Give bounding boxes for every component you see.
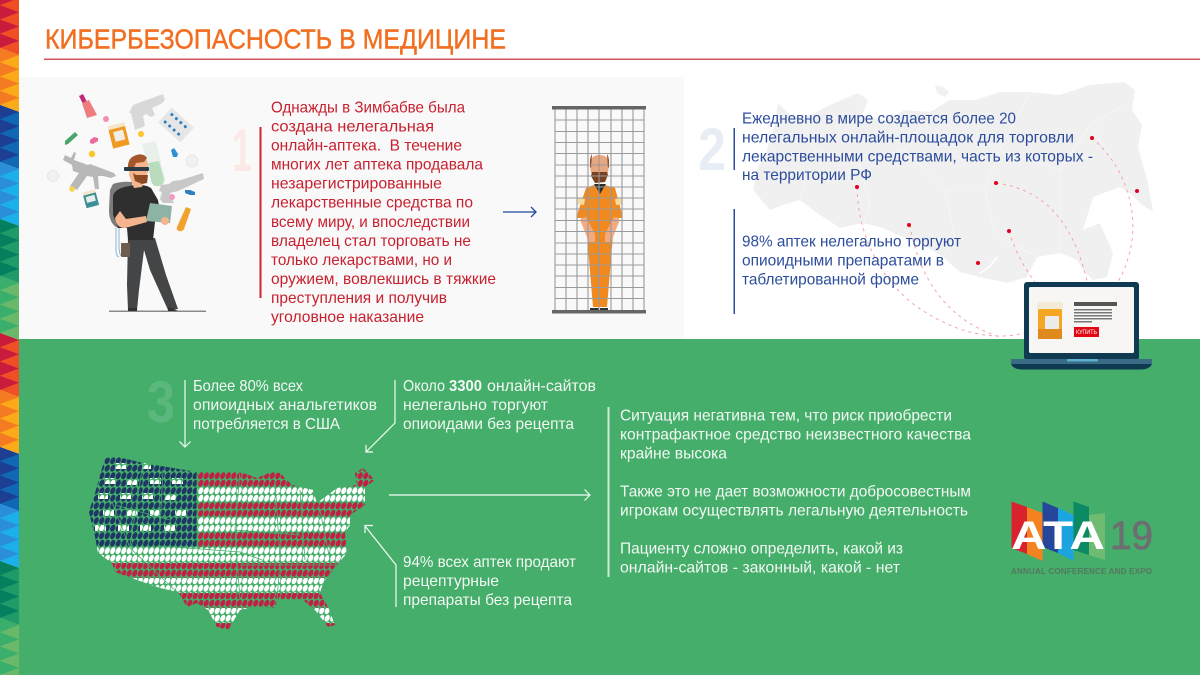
text block: story: преступления и получив [271, 290, 447, 307]
pill: pink [103, 116, 109, 122]
text block: pharmacies [403, 554, 577, 609]
text block: online pharmacies: лекарственными средствами, часть из которых - [742, 148, 1093, 166]
decorative side strip [0, 0, 19, 675]
text block: online pharmacies: на территории РФ [742, 167, 872, 184]
text block: US consumption: опиоидных анальгетиков [193, 397, 377, 414]
icon: large test tube [142, 141, 165, 186]
icon: orange bottle [108, 122, 130, 149]
arm [115, 211, 147, 228]
hair [128, 154, 147, 170]
text block: story: многих лет аптека продавала [271, 157, 483, 174]
text block: pharmacies: препараты без рецепта [403, 592, 572, 609]
title: КИБЕРБЕЗОПАСНОСТЬ В МЕДИЦИНЕ [45, 24, 506, 54]
panel: story background [19, 77, 684, 339]
capsule: blue [185, 190, 195, 195]
text block: opioid share: 98% аптек нелегально торгуют [742, 234, 962, 250]
text block: consequences: крайне высока [620, 446, 727, 463]
title underline [44, 58, 1200, 60]
pill bottle [1037, 302, 1063, 339]
text block: story: только лекарствами, но и [271, 252, 452, 269]
top rail [552, 106, 646, 110]
number 3: 3 [147, 370, 175, 435]
text block: US consumption [193, 378, 377, 433]
capsule: blue [171, 148, 178, 157]
pill: yellow [69, 186, 75, 192]
text block: websites: Около [403, 378, 445, 395]
icon: tube liquid [148, 161, 164, 186]
text block: pharmacies: 94% всех аптек продают [403, 554, 577, 571]
panel: Russia map [753, 82, 1153, 283]
divider: opioid share [734, 209, 735, 314]
text block: US consumption: потребляется в США [193, 416, 340, 433]
text block: online pharmacies: нелегальных онлайн-площадок для торговли [742, 130, 1074, 146]
map: USA flag made of pills [89, 457, 374, 630]
icon: small test tube [65, 132, 78, 145]
divider: online pharmacies [734, 128, 735, 170]
text block: story: лекарственные средства по [271, 195, 473, 212]
text block: consequences: Пациенту сложно определить, какой из [620, 540, 903, 557]
icon: revolver [159, 173, 204, 203]
text block: story: владелец стал торговать не [271, 233, 471, 250]
text block: consequences: Ситуация негативна тем, что риск приобрести [620, 408, 952, 425]
legs [127, 238, 178, 310]
text block: pharmacies: рецептурные [403, 573, 499, 590]
head [129, 156, 148, 188]
icon: hacker figure [109, 154, 206, 312]
wires [116, 228, 123, 257]
tablet [146, 203, 172, 223]
arrow: map to consequences [389, 490, 590, 500]
number 1: 1 [232, 117, 252, 184]
dashed routes and map markers [855, 136, 1139, 337]
text block: story: Однажды в Зимбабве была [271, 100, 465, 116]
text block: websites: нелегально торгуют [403, 397, 549, 414]
state borders [112, 463, 345, 600]
ground shadow [109, 310, 206, 312]
pill: white [48, 170, 58, 182]
logo: ATA 19: 19 [1110, 514, 1153, 558]
icon cluster: drugs and weapons [48, 94, 204, 231]
text block: websites: опиоидами без рецепта [403, 416, 574, 433]
arrow: to map from websites [366, 380, 395, 452]
buy button [1074, 327, 1099, 337]
eye mask [124, 167, 149, 171]
text block: story [271, 100, 496, 326]
bottom rail [552, 310, 646, 314]
prisoner [577, 154, 623, 310]
product description [1074, 302, 1117, 322]
pill: white [186, 155, 198, 167]
text block: story: уголовное наказание [271, 309, 424, 326]
icon: orange test tube [177, 207, 191, 231]
bars [555, 109, 644, 311]
logo: ATA 19: ANNUAL CONFERENCE AND EXPO [1011, 567, 1152, 576]
arrow: to map from US consumption [180, 380, 190, 447]
icon: blister pack [158, 108, 194, 142]
number 2: 2 [698, 116, 726, 183]
buy button: КУПИТЬ [1076, 330, 1097, 336]
gadget [121, 243, 130, 257]
text block: story: всему миру, и впоследствии [271, 214, 470, 231]
icon: teal bottle [82, 189, 99, 208]
pill: pink [169, 194, 175, 200]
text block: websites: 3300 [449, 378, 482, 395]
text block: consequences: контрафактное средство неизвестного качества [620, 427, 971, 444]
text block: online pharmacies: Ежедневно в мире создается более 20 [742, 110, 1016, 128]
text block: story: создана нелегальная [271, 118, 434, 136]
icon: prisoner behind bars [552, 106, 646, 314]
torso [113, 184, 160, 240]
hand [161, 217, 169, 225]
text block: consequences: Также это не дает возможности добросовестным [620, 484, 971, 501]
pill: yellow [89, 151, 95, 157]
shoes [128, 307, 178, 311]
icon: pistol [129, 94, 165, 130]
text block: websites [403, 378, 596, 433]
text block: websites: онлайн-сайтов [487, 378, 596, 395]
logo: ATA 19 [1011, 502, 1153, 576]
divider: consequences [608, 407, 610, 577]
beard [133, 173, 148, 184]
logo: ATA 19: ATA [1011, 514, 1105, 558]
text block: opioid share: опиоидными препаратами в [742, 252, 944, 270]
pill: yellow [138, 131, 144, 137]
text block: story: незарегистрированные [271, 176, 442, 193]
icon: laptop with pharmacy page [1011, 282, 1152, 370]
text block: online pharmacies [742, 110, 1093, 184]
text block: consequences: онлайн-сайтов - законный, какой - нет [620, 559, 901, 576]
text block: opioid share: таблетированной форме [742, 272, 919, 288]
text block: opioid share [742, 234, 962, 288]
divider: story [260, 127, 262, 298]
arrow: pharmacies to map [365, 526, 396, 607]
icon: dropper bottle [79, 94, 97, 118]
text block: consequences: игрокам осуществлять легальную деятельность [620, 503, 968, 520]
text block: US consumption: Более 80% всех [193, 378, 303, 395]
text block: story: оружием, вовлекшись в тяжкие [271, 271, 496, 288]
text block: story: онлайн-аптека. В течение [271, 138, 462, 155]
backpack [109, 182, 132, 228]
icon: rifle [63, 152, 116, 190]
text block: consequences [620, 408, 971, 576]
green panel background [19, 339, 1200, 675]
capsule: pink [90, 137, 98, 144]
arrow to prison [503, 207, 536, 217]
